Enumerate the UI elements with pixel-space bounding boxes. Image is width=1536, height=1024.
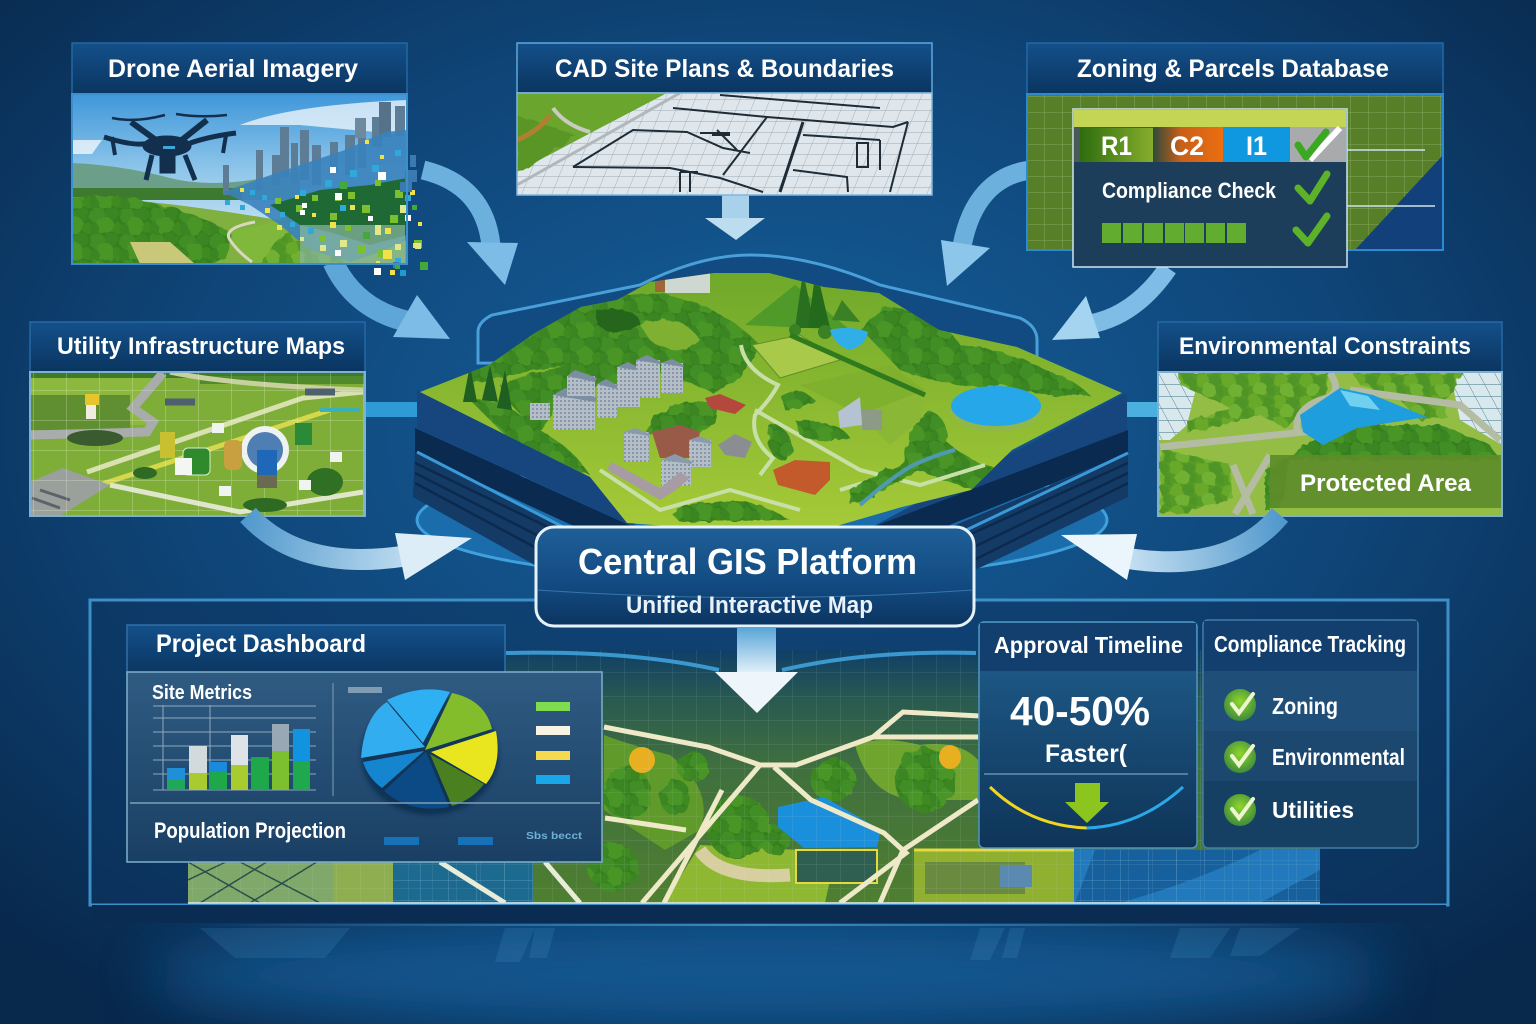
map: unified interactive map	[188, 650, 1320, 903]
text: compliance check: Compliance Check	[1102, 178, 1277, 203]
subtitle: Unified Interactive Map	[626, 592, 873, 619]
panel: drone aerial imagery	[72, 43, 428, 276]
item: zoning	[1224, 689, 1338, 721]
decoration: pixel dissolve mass	[223, 130, 428, 276]
arrow: zoning to platform upper	[941, 170, 1030, 286]
panel: compliance tracking	[1203, 620, 1418, 848]
heading: environmental: Environmental Constraints	[1179, 333, 1471, 360]
icon: check	[1296, 216, 1327, 243]
city towers	[223, 102, 405, 195]
heading: zoning: Zoning & Parcels Database	[1077, 55, 1389, 83]
divider	[332, 683, 334, 796]
curve	[990, 787, 1183, 828]
small bars	[384, 837, 493, 845]
heading: drone	[72, 43, 407, 94]
lower left strip	[188, 860, 333, 903]
panel: project dashboard	[127, 625, 602, 862]
stat: 40-50%	[1010, 688, 1150, 734]
forest: hills	[470, 294, 1090, 491]
image: drone over landscape	[72, 94, 407, 264]
icon: down arrow	[1065, 783, 1109, 823]
text: population projection: Population Projection	[154, 818, 346, 843]
title: Central GIS Platform	[578, 541, 917, 582]
heading: CAD: CAD Site Plans & Boundaries	[555, 55, 894, 83]
callout: compliance card	[1073, 109, 1347, 267]
legend	[536, 702, 570, 784]
arrow: drone to platform upper	[423, 170, 518, 285]
image: CAD drawing	[517, 93, 932, 195]
arrow: utility connector	[365, 402, 420, 417]
heading: Compliance Tracking	[1214, 631, 1406, 657]
arrow: CAD down	[705, 195, 765, 240]
arrow: drone to platform lower	[333, 262, 450, 339]
forests	[1160, 373, 1500, 513]
roads	[604, 712, 980, 903]
text: protected area: Protected Area	[1300, 470, 1472, 497]
fields	[752, 335, 925, 445]
panel border	[72, 94, 407, 264]
tab: R1	[1080, 128, 1153, 162]
text: site metrics: Site Metrics	[152, 682, 252, 704]
progress bar	[1102, 223, 1246, 243]
central 3D terrain map	[420, 268, 1130, 530]
river	[860, 450, 955, 505]
light green grounds	[604, 735, 704, 850]
lower right strip	[1074, 850, 1320, 903]
roads	[600, 345, 985, 510]
image: parcel grid	[1027, 94, 1443, 250]
item: zoning: Zoning	[1272, 693, 1338, 719]
panel: bottom frame	[90, 600, 1448, 905]
body	[127, 672, 602, 862]
lake: small	[830, 328, 868, 350]
arrow: utility to platform	[248, 515, 472, 580]
panel: CAD site plans	[517, 43, 932, 195]
image: environment map	[1158, 372, 1502, 516]
cypress	[463, 365, 512, 410]
striped field	[796, 850, 877, 883]
heading: utility	[30, 322, 365, 372]
bottom reflection streaks	[148, 920, 1388, 1024]
buildings	[530, 355, 882, 500]
arrow: platform down to map	[715, 628, 798, 713]
heading: CAD	[517, 43, 932, 93]
glow line under banner	[506, 653, 976, 670]
stat label: Faster(	[1045, 740, 1128, 768]
tree clusters	[588, 748, 955, 892]
item: environmental: Environmental	[1272, 744, 1405, 770]
arrow: zoning to platform lower	[1052, 268, 1168, 340]
tab: C2	[1153, 127, 1223, 162]
badge: Sbs becct	[526, 831, 583, 842]
heading: dashboard: Project Dashboard	[156, 630, 366, 658]
panel: environmental constraints	[1158, 322, 1502, 516]
arrow: environment connector	[1125, 402, 1158, 417]
heading: drone: Drone Aerial Imagery	[108, 55, 358, 83]
heading: dashboard	[127, 625, 505, 675]
item: environmental	[1224, 741, 1405, 773]
image: utility map	[30, 372, 365, 516]
heading: utility: Utility Infrastructure Maps	[57, 333, 345, 360]
lake: large	[950, 386, 1042, 432]
tree clumps	[67, 430, 123, 446]
item: utilities	[1224, 794, 1354, 826]
icon: drone	[104, 114, 236, 180]
item: utilities: Utilities	[1272, 797, 1354, 823]
bar chart	[153, 705, 316, 790]
icon: tab check	[1290, 127, 1346, 162]
icon: check	[1298, 174, 1327, 201]
water	[1300, 388, 1427, 445]
lake	[778, 797, 881, 848]
heading: zoning	[1027, 43, 1443, 94]
panel: approval timeline	[979, 622, 1197, 848]
panel: utility infrastructure maps	[30, 322, 365, 516]
buildings far	[665, 273, 710, 293]
roads	[1160, 373, 1500, 514]
left side faces	[417, 390, 640, 530]
tab: R1: R1	[1101, 131, 1132, 161]
tab: I1: I1	[1246, 131, 1267, 161]
panel: zoning and parcels database	[1027, 43, 1443, 267]
heading: environmental	[1158, 322, 1502, 372]
tab: C2: C2	[1170, 131, 1204, 161]
pie chart	[361, 689, 499, 815]
tab: I1	[1223, 127, 1290, 162]
tree rows	[470, 391, 925, 522]
right side faces	[870, 393, 1127, 528]
arrow: environment to platform	[1061, 515, 1280, 580]
title banner	[536, 527, 974, 626]
central platform base	[413, 255, 1128, 580]
heading: Approval Timeline	[994, 632, 1183, 658]
lower ledge	[92, 905, 1446, 923]
forest: peak	[745, 281, 860, 339]
